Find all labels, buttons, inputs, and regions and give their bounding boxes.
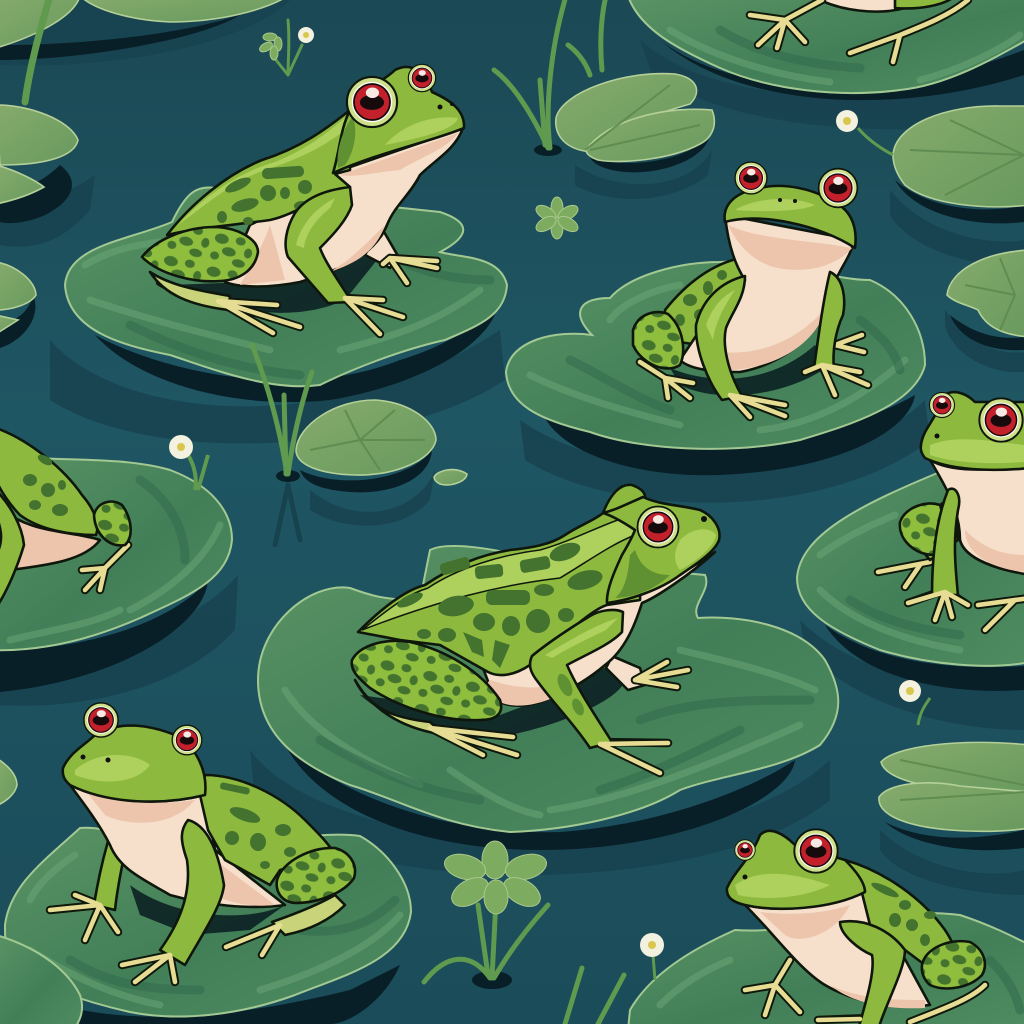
head — [333, 67, 464, 173]
belly — [70, 785, 285, 907]
belly — [0, 505, 100, 570]
belly — [225, 128, 463, 286]
far front foot — [606, 656, 688, 690]
lily pad: frog two — [506, 262, 925, 449]
head — [727, 831, 865, 909]
head — [725, 186, 856, 248]
lily pad: bottom right — [628, 913, 1024, 1024]
body — [358, 485, 645, 675]
frog one: top left — [142, 64, 464, 334]
left rear foot — [640, 362, 693, 398]
shadow under frog — [130, 885, 285, 935]
leg top — [895, 0, 955, 8]
back foot — [355, 680, 517, 755]
left foot — [750, 0, 822, 48]
front leg — [530, 610, 668, 773]
eye — [637, 506, 679, 548]
front leg — [286, 187, 403, 334]
body spots — [417, 567, 605, 668]
lily pad: bottom left — [5, 828, 411, 1017]
shadow under frog — [670, 345, 830, 395]
front leg — [818, 921, 905, 1024]
frog four: left edge — [0, 428, 131, 608]
lily pad: left — [0, 455, 232, 650]
lily pad: top right small round — [893, 106, 1024, 207]
plant: bottom large flower — [424, 841, 549, 989]
lily pad: top left leaves — [0, 105, 78, 204]
thigh — [922, 941, 985, 988]
plant: left flower — [169, 435, 208, 490]
lily pad: left edge — [0, 758, 17, 806]
lily pad: right small radial — [947, 250, 1024, 337]
thigh — [900, 504, 943, 555]
thigh — [94, 502, 131, 545]
eyes — [735, 840, 755, 860]
lily pad: frog one — [65, 187, 507, 386]
foot — [82, 545, 128, 590]
lily pad: center — [258, 546, 838, 832]
plant: right flower — [899, 680, 930, 725]
front leg — [122, 820, 224, 982]
left front leg — [696, 276, 785, 417]
plant: top right flower — [836, 110, 893, 155]
body behind — [905, 495, 958, 560]
right rear foot — [835, 335, 864, 352]
lily pad: right two leaves — [879, 742, 1024, 831]
dorsal stripe — [178, 115, 348, 225]
body — [200, 775, 335, 885]
rear foot — [878, 562, 930, 587]
head — [921, 392, 1024, 470]
belly — [680, 215, 855, 372]
belly — [480, 552, 715, 706]
eyes — [408, 64, 436, 92]
plant: top flower — [258, 20, 314, 75]
shadow under frog — [170, 240, 385, 313]
back foot — [910, 985, 985, 1022]
near foot — [978, 598, 1024, 630]
shadow under frog — [360, 660, 625, 738]
back foot — [150, 272, 300, 333]
far front foot — [365, 225, 437, 283]
body — [167, 110, 350, 235]
right foot — [850, 0, 968, 62]
plant: middle grass — [252, 345, 312, 545]
eyes — [84, 703, 118, 737]
thigh — [277, 848, 355, 903]
lily pad: bottom left corner — [0, 935, 82, 1024]
frog two: top right — [633, 162, 868, 417]
lily pad: round middle — [296, 400, 436, 475]
belly — [930, 460, 1024, 575]
far front leg and foot — [50, 828, 128, 940]
head — [63, 726, 205, 802]
lily pad: top right — [628, 0, 1024, 93]
belly — [745, 890, 930, 1006]
plant: top left stem — [25, 0, 50, 102]
eyes — [929, 392, 955, 418]
frog five: right edge — [878, 392, 1024, 630]
body — [0, 428, 97, 535]
frog six: bottom left — [50, 703, 355, 982]
frog three: center — [352, 485, 720, 773]
front leg — [908, 489, 968, 620]
body — [845, 860, 953, 965]
dorsal stripe — [362, 515, 635, 630]
plant: bottom right flower — [640, 933, 664, 980]
belly — [812, 0, 905, 12]
lily pad: right — [797, 470, 1024, 666]
lily pad: left small — [0, 262, 36, 334]
lily pad: top two leaves — [556, 74, 714, 161]
thigh — [142, 227, 258, 281]
eyes — [735, 162, 767, 194]
frog eight: top right feet — [750, 0, 968, 62]
thigh — [633, 312, 683, 368]
frog seven: bottom right — [727, 829, 985, 1024]
head — [603, 497, 720, 603]
plant: floating rosette — [533, 197, 581, 239]
plant: bottom grass — [565, 968, 624, 1024]
spots — [217, 166, 312, 225]
body back — [665, 258, 745, 345]
front leg — [0, 490, 24, 608]
lily pad: top left corner — [0, 0, 288, 48]
plant: top grass — [494, 0, 606, 156]
lily pad: tiny — [434, 470, 467, 485]
back foot — [226, 895, 345, 955]
right leg — [805, 272, 868, 395]
thigh — [352, 641, 501, 720]
far foot — [745, 960, 800, 1015]
